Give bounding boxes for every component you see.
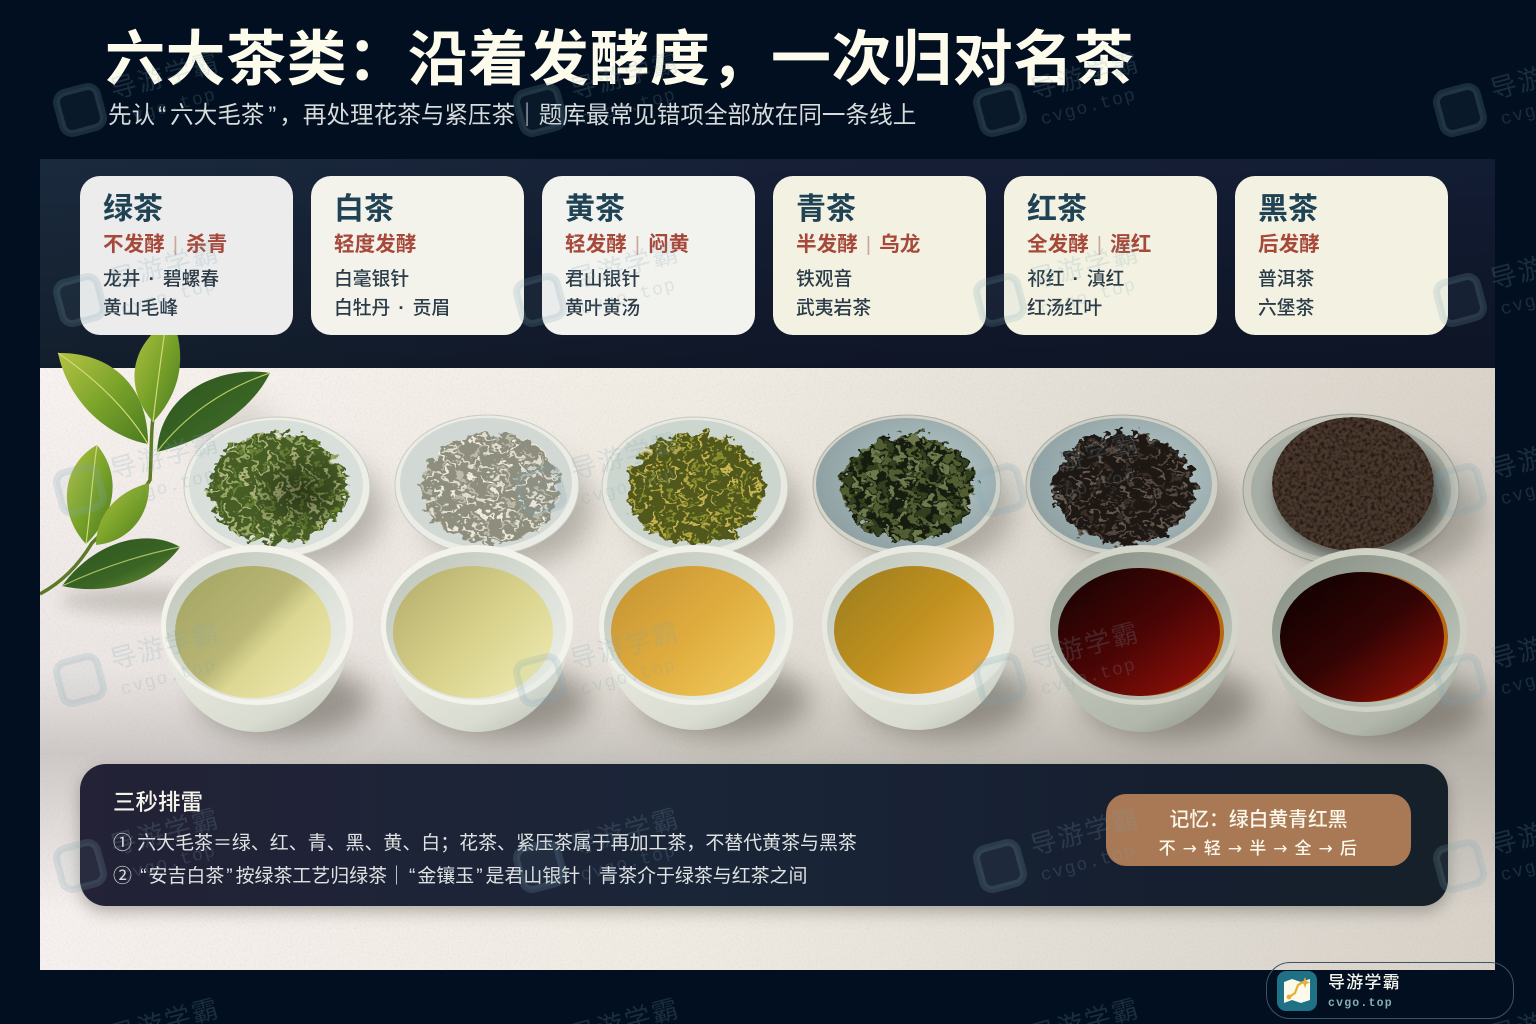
- photo scene: tea leaves and cups: [40, 159, 1495, 970]
- watermarks: cvgo.top: [119, 656, 219, 700]
- watermarks: cvgo.top: [1039, 842, 1139, 886]
- card: white tea: 白茶: [334, 193, 394, 226]
- card: green tea: [80, 176, 293, 335]
- summary panel shadow: [80, 770, 1448, 912]
- card: oolong tea: [773, 176, 986, 335]
- cup: yellow tea liquor: [599, 545, 793, 730]
- card: green tea: 黄山毛峰: [103, 297, 178, 318]
- card: red tea: [1004, 176, 1217, 335]
- watermarks: cvgo.top: [119, 276, 219, 320]
- watermarks: cvgo.top: [579, 656, 679, 700]
- watermarks: 导游学霸: [1027, 427, 1143, 485]
- dish: oolong tea: [813, 415, 1001, 555]
- dish: green tea: [184, 417, 370, 557]
- card: dark tea: [1235, 176, 1448, 335]
- watermarks: cvgo.top: [1039, 656, 1139, 700]
- watermarks: 导游学霸: [567, 617, 683, 675]
- cup: oolong tea liquor: [822, 545, 1014, 730]
- card: dark tea: 普洱茶: [1258, 268, 1314, 289]
- watermarks: 导游学霸: [107, 803, 223, 861]
- card: yellow tea: 黄叶黄汤: [565, 297, 640, 318]
- watermarks: cvgo.top: [119, 86, 219, 130]
- dark upper band: [40, 159, 1496, 369]
- cup: white tea liquor: [381, 545, 573, 732]
- card: dark tea: 后发酵: [1258, 233, 1320, 256]
- card: oolong tea: 青茶: [796, 193, 856, 226]
- watermarks: 导游学霸: [567, 803, 683, 861]
- card: yellow tea: 君山银针: [565, 268, 640, 289]
- card: oolong tea: 武夷岩茶: [796, 297, 871, 318]
- tea type cards row: [80, 176, 1448, 335]
- card: red tea: 全发酵 | 渥红: [1027, 233, 1151, 256]
- card: white tea: [311, 176, 524, 335]
- dish: red tea: [1026, 415, 1218, 555]
- memory pill: [1106, 794, 1411, 866]
- watermarks: 导游学霸: [107, 617, 223, 675]
- card: red tea: 祁红 · 滇红: [1027, 268, 1124, 289]
- watermarks: 导游学霸: [1027, 617, 1143, 675]
- card: yellow tea: 黄茶: [565, 193, 625, 226]
- watermarks: cvgo.top: [579, 276, 679, 320]
- card: white tea: 白毫银针: [334, 268, 409, 289]
- watermarks: 导游学霸: [1027, 47, 1143, 105]
- card: oolong tea: 半发酵 | 乌龙: [796, 233, 920, 256]
- card: green tea: 绿茶: [103, 193, 163, 226]
- watermarks: 导游学霸: [107, 237, 223, 295]
- watermarks: 导游学霸: [567, 237, 683, 295]
- dish: yellow tea: [602, 417, 788, 557]
- watermarks: 导游学霸: [567, 427, 683, 485]
- cup: red tea liquor: [1045, 545, 1239, 732]
- icon: fresh tea sprig: [40, 318, 280, 614]
- watermarks: cvgo.top: [579, 86, 679, 130]
- watermarks: cvgo.top: [119, 842, 219, 886]
- card: dark tea: 黑茶: [1258, 193, 1318, 226]
- card: white tea: 轻度发酵: [334, 233, 416, 256]
- watermarks: cvgo.top: [1039, 466, 1139, 510]
- watermarks: 导游学霸: [107, 47, 223, 105]
- brand url: cvgo.top: [1328, 997, 1393, 1010]
- watermarks: cvgo.top: [1039, 276, 1139, 320]
- card: dark tea: 六堡茶: [1258, 297, 1314, 318]
- cup: dark tea liquor: [1267, 548, 1467, 736]
- cup: green tea liquor: [161, 545, 353, 732]
- card: yellow tea: 轻发酵 | 闷黄: [565, 233, 689, 256]
- watermarks: cvgo.top: [579, 466, 679, 510]
- dish: dark tea cake: [1243, 414, 1459, 566]
- watermarks: cvgo.top: [579, 842, 679, 886]
- cup shadows: [200, 664, 1483, 744]
- card: red tea: 红茶: [1027, 193, 1087, 226]
- title: 六大茶类：沿着发酵度，一次归对名茶: [105, 26, 1134, 93]
- pill line 2: 不 → 轻 → 半 → 全 → 后: [1159, 834, 1358, 859]
- watermarks: cvgo.top: [119, 466, 219, 510]
- card: yellow tea: [542, 176, 755, 335]
- icon: map logo: [1277, 971, 1317, 1011]
- card: green tea: 龙井 · 碧螺春: [103, 268, 219, 289]
- rule 1: ① 六大毛茶＝绿、红、青、黑、黄、白；花茶、紧压茶属于再加工茶，不替代黄茶与黑茶: [113, 833, 857, 854]
- table surface: [40, 368, 1496, 970]
- watermarks: 导游学霸: [1027, 237, 1143, 295]
- card: white tea: 白牡丹 · 贡眉: [334, 297, 450, 318]
- watermarks: 导游学霸: [567, 47, 683, 105]
- subtitle: 先认“六大毛茶”，再处理花茶与紧压茶｜题库最常见错项全部放在同一条线上: [108, 103, 916, 129]
- card: oolong tea: 铁观音: [796, 268, 852, 289]
- panel heading: 三秒排雷: [113, 790, 203, 815]
- watermarks: cvgo.top: [1039, 86, 1139, 130]
- watermarks: 导游学霸: [107, 427, 223, 485]
- rule 2: ② “安吉白茶”按绿茶工艺归绿茶｜“金镶玉”是君山银针｜青茶介于绿茶与红茶之间: [113, 866, 807, 887]
- card: green tea: 不发酵 | 杀青: [103, 233, 227, 256]
- dish: white tea: [395, 415, 579, 555]
- dish shadows: [213, 452, 1482, 577]
- brand badge: [1266, 962, 1514, 1019]
- summary panel text: [113, 790, 857, 887]
- pill line 1: 记忆：绿白黄青红黑: [1169, 809, 1348, 831]
- summary panel background: [80, 764, 1448, 906]
- card: red tea: 红汤红叶: [1027, 297, 1102, 318]
- brand name: 导游学霸: [1328, 973, 1401, 992]
- watermarks: 导游学霸: [1027, 803, 1143, 861]
